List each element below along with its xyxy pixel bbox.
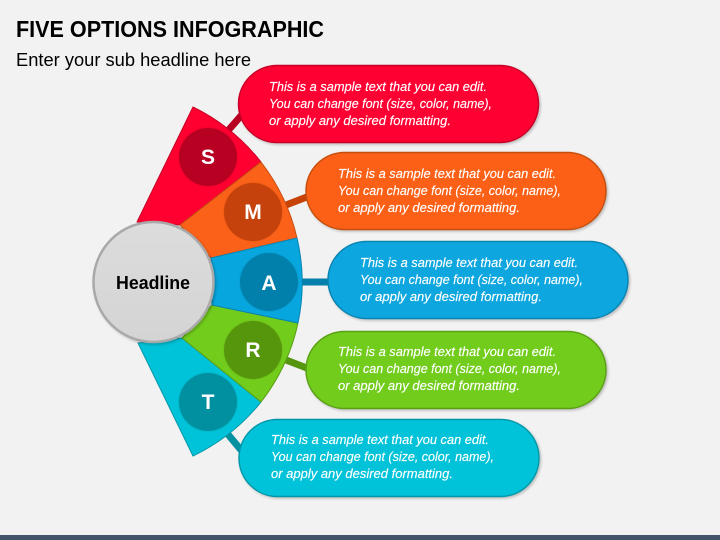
badge: M xyxy=(224,183,282,241)
pill: orange: You can change font (size, color, name), xyxy=(338,183,561,198)
pill: red: You can change font (size, color, name), xyxy=(269,96,492,111)
pill: teal: This is a sample text that you can edit. xyxy=(271,432,489,447)
central headline circle xyxy=(94,222,214,342)
badge: A: A xyxy=(261,272,277,295)
central headline circle: Headline xyxy=(116,273,190,293)
pill: red: This is a sample text that you can edit. xyxy=(269,79,487,94)
fan segment: R green xyxy=(182,305,298,402)
badge: T: T xyxy=(202,391,215,414)
pill: orange xyxy=(306,152,606,230)
pill: red xyxy=(238,66,538,142)
fan segment: T teal xyxy=(138,338,261,456)
badge: R: R xyxy=(245,339,261,362)
subtitle: Enter your sub headline here xyxy=(16,50,251,70)
pill: teal: You can change font (size, color, name), xyxy=(271,449,494,464)
title: FIVE OPTIONS INFOGRAPHIC xyxy=(16,16,324,42)
badge: S xyxy=(179,128,237,186)
pill: orange: This is a sample text that you can edit. xyxy=(338,166,556,181)
pill: blue xyxy=(328,242,628,318)
footer bar xyxy=(0,535,720,540)
pill: orange: or apply any desired formatting. xyxy=(338,200,520,215)
fan segment: M orange xyxy=(180,162,297,258)
pill: blue: This is a sample text that you can edit. xyxy=(360,255,578,270)
pill: green: This is a sample text that you can edit. xyxy=(338,344,556,359)
badge: A xyxy=(240,253,298,311)
badge: S: S xyxy=(201,146,215,169)
pill: green xyxy=(306,332,606,408)
pill: blue: or apply any desired formatting. xyxy=(360,289,542,304)
badge: T xyxy=(179,373,237,431)
fan segment: S red xyxy=(137,107,261,225)
badge: M: M xyxy=(244,201,262,224)
pill: teal: or apply any desired formatting. xyxy=(271,466,453,481)
pill: green: or apply any desired formatting. xyxy=(338,378,520,393)
pill: red: or apply any desired formatting. xyxy=(269,113,451,128)
connectors between fan and pills xyxy=(226,110,332,456)
pill: green: You can change font (size, color, name), xyxy=(338,361,561,376)
pill: blue: You can change font (size, color, name), xyxy=(360,272,583,287)
fan segment: A blue xyxy=(211,238,302,323)
badge: R xyxy=(224,321,282,379)
pill: teal xyxy=(239,420,539,496)
